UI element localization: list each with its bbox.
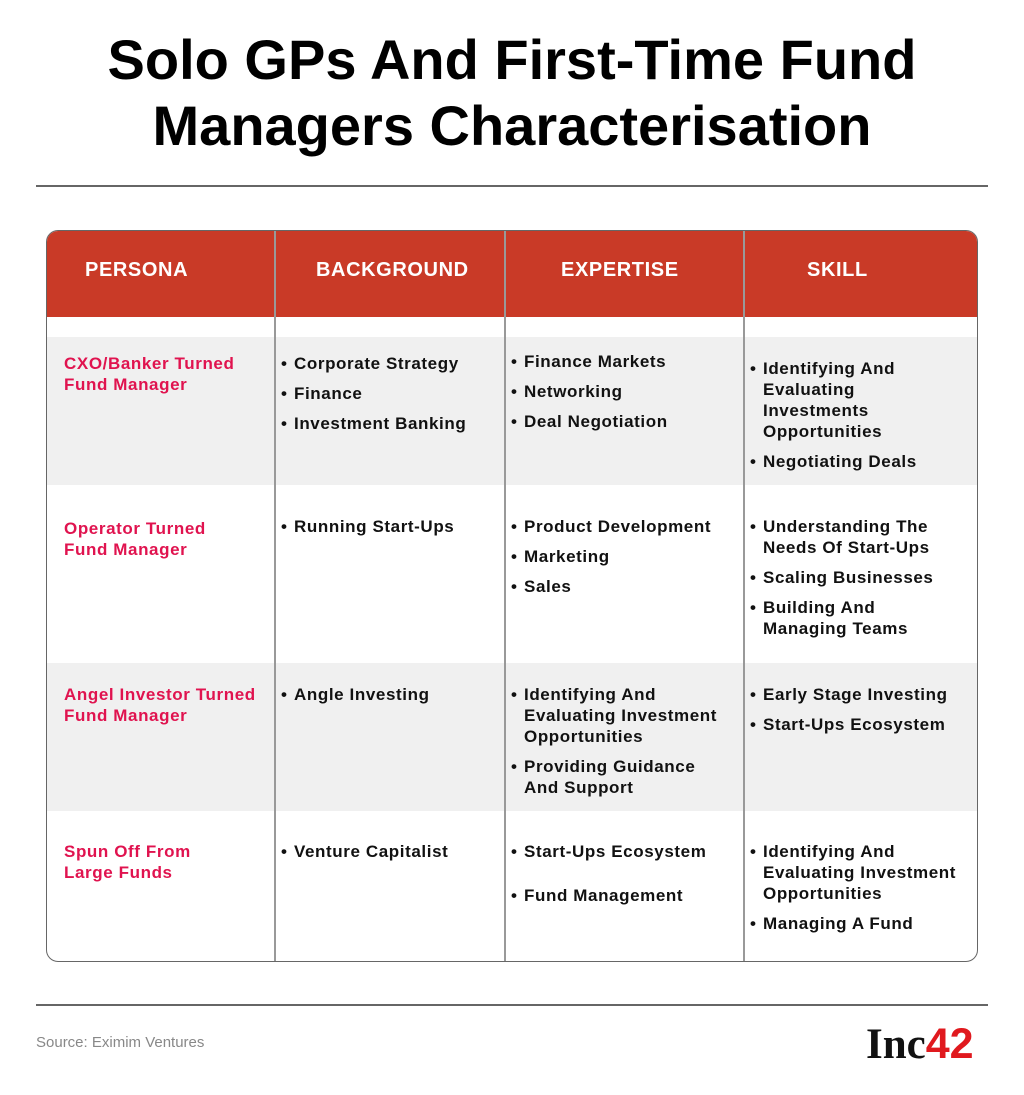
row 3 background: Angle Investing [294,685,430,704]
row 1 persona: CXO/Banker Turned [64,354,234,373]
row 2 background: Running Start-Ups [294,517,454,536]
row 3 expertise: Identifying And Evaluating Investment Opportunities [524,685,717,746]
row 4 expertise: Start-Ups Ecosystem [524,842,706,861]
row 2 persona: Operator Turned [64,519,206,538]
row 1 expertise: Deal Negotiation [524,412,668,431]
row 1 skill: Identifying And Evaluating Investments Opportunities [763,359,895,441]
row 3 expertise: Providing Guidance And Support [524,757,695,797]
row 2 skill: Scaling Businesses [763,568,933,587]
row 3 skill [750,685,948,734]
row 2 skill [750,517,933,638]
row 1 background: Investment Banking [294,414,466,433]
row 1 skill [750,359,917,471]
row 4 background: Venture Capitalist [294,842,448,861]
row 2 expertise: Sales [524,577,571,596]
source text: Source: Eximim Ventures [36,1034,204,1051]
row 3 skill: Start-Ups Ecosystem [763,715,945,734]
header: persona: PERSONA [85,259,188,281]
row 2 persona: Fund Manager [64,540,187,559]
row 1 skill: Negotiating Deals [763,452,917,471]
row 1 persona [64,354,234,394]
row 4 persona: Spun Off From [64,842,191,861]
header row [47,231,979,317]
row 3 expertise [512,685,717,797]
row 4 expertise: Fund Management [524,886,683,905]
title [108,28,916,157]
row 2 persona [64,519,206,559]
row 1 persona: Fund Manager [64,375,187,394]
row 1 expertise: Networking [524,382,623,401]
header: skill: SKILL [807,259,868,281]
row 1 background [282,354,466,433]
logo: Inc42: Inc42 [866,1020,974,1068]
row 3 persona: Fund Manager [64,706,187,725]
row 1 expertise: Finance Markets [524,352,666,371]
row 1 expertise [512,352,668,431]
header: background: BACKGROUND [316,259,469,281]
row 1 background: Corporate Strategy [294,354,459,373]
row 4 skill: Managing A Fund [763,914,913,933]
header: expertise: EXPERTISE [561,259,679,281]
row 3 persona: Angel Investor Turned [64,685,256,704]
row 4 skill: Identifying And Evaluating Investment Opportunities [763,842,956,903]
row 4 persona: Large Funds [64,863,173,882]
row 3 skill: Early Stage Investing [763,685,948,704]
row 2 expertise: Marketing [524,547,610,566]
row 4 skill [750,842,956,933]
row 3 persona [64,685,256,725]
row 1 background: Finance [294,384,362,403]
row 2 expertise: Product Development [524,517,711,536]
row 4 expertise [512,842,706,905]
table [46,230,978,962]
row 2 expertise [512,517,711,596]
title: Solo GPs And First-Time Fund [108,28,916,91]
row 4 persona [64,842,191,882]
row 2 skill: Building And Managing Teams [763,598,908,638]
title: Managers Characterisation [153,94,871,157]
row 2 skill: Understanding The Needs Of Start-Ups [763,517,930,557]
